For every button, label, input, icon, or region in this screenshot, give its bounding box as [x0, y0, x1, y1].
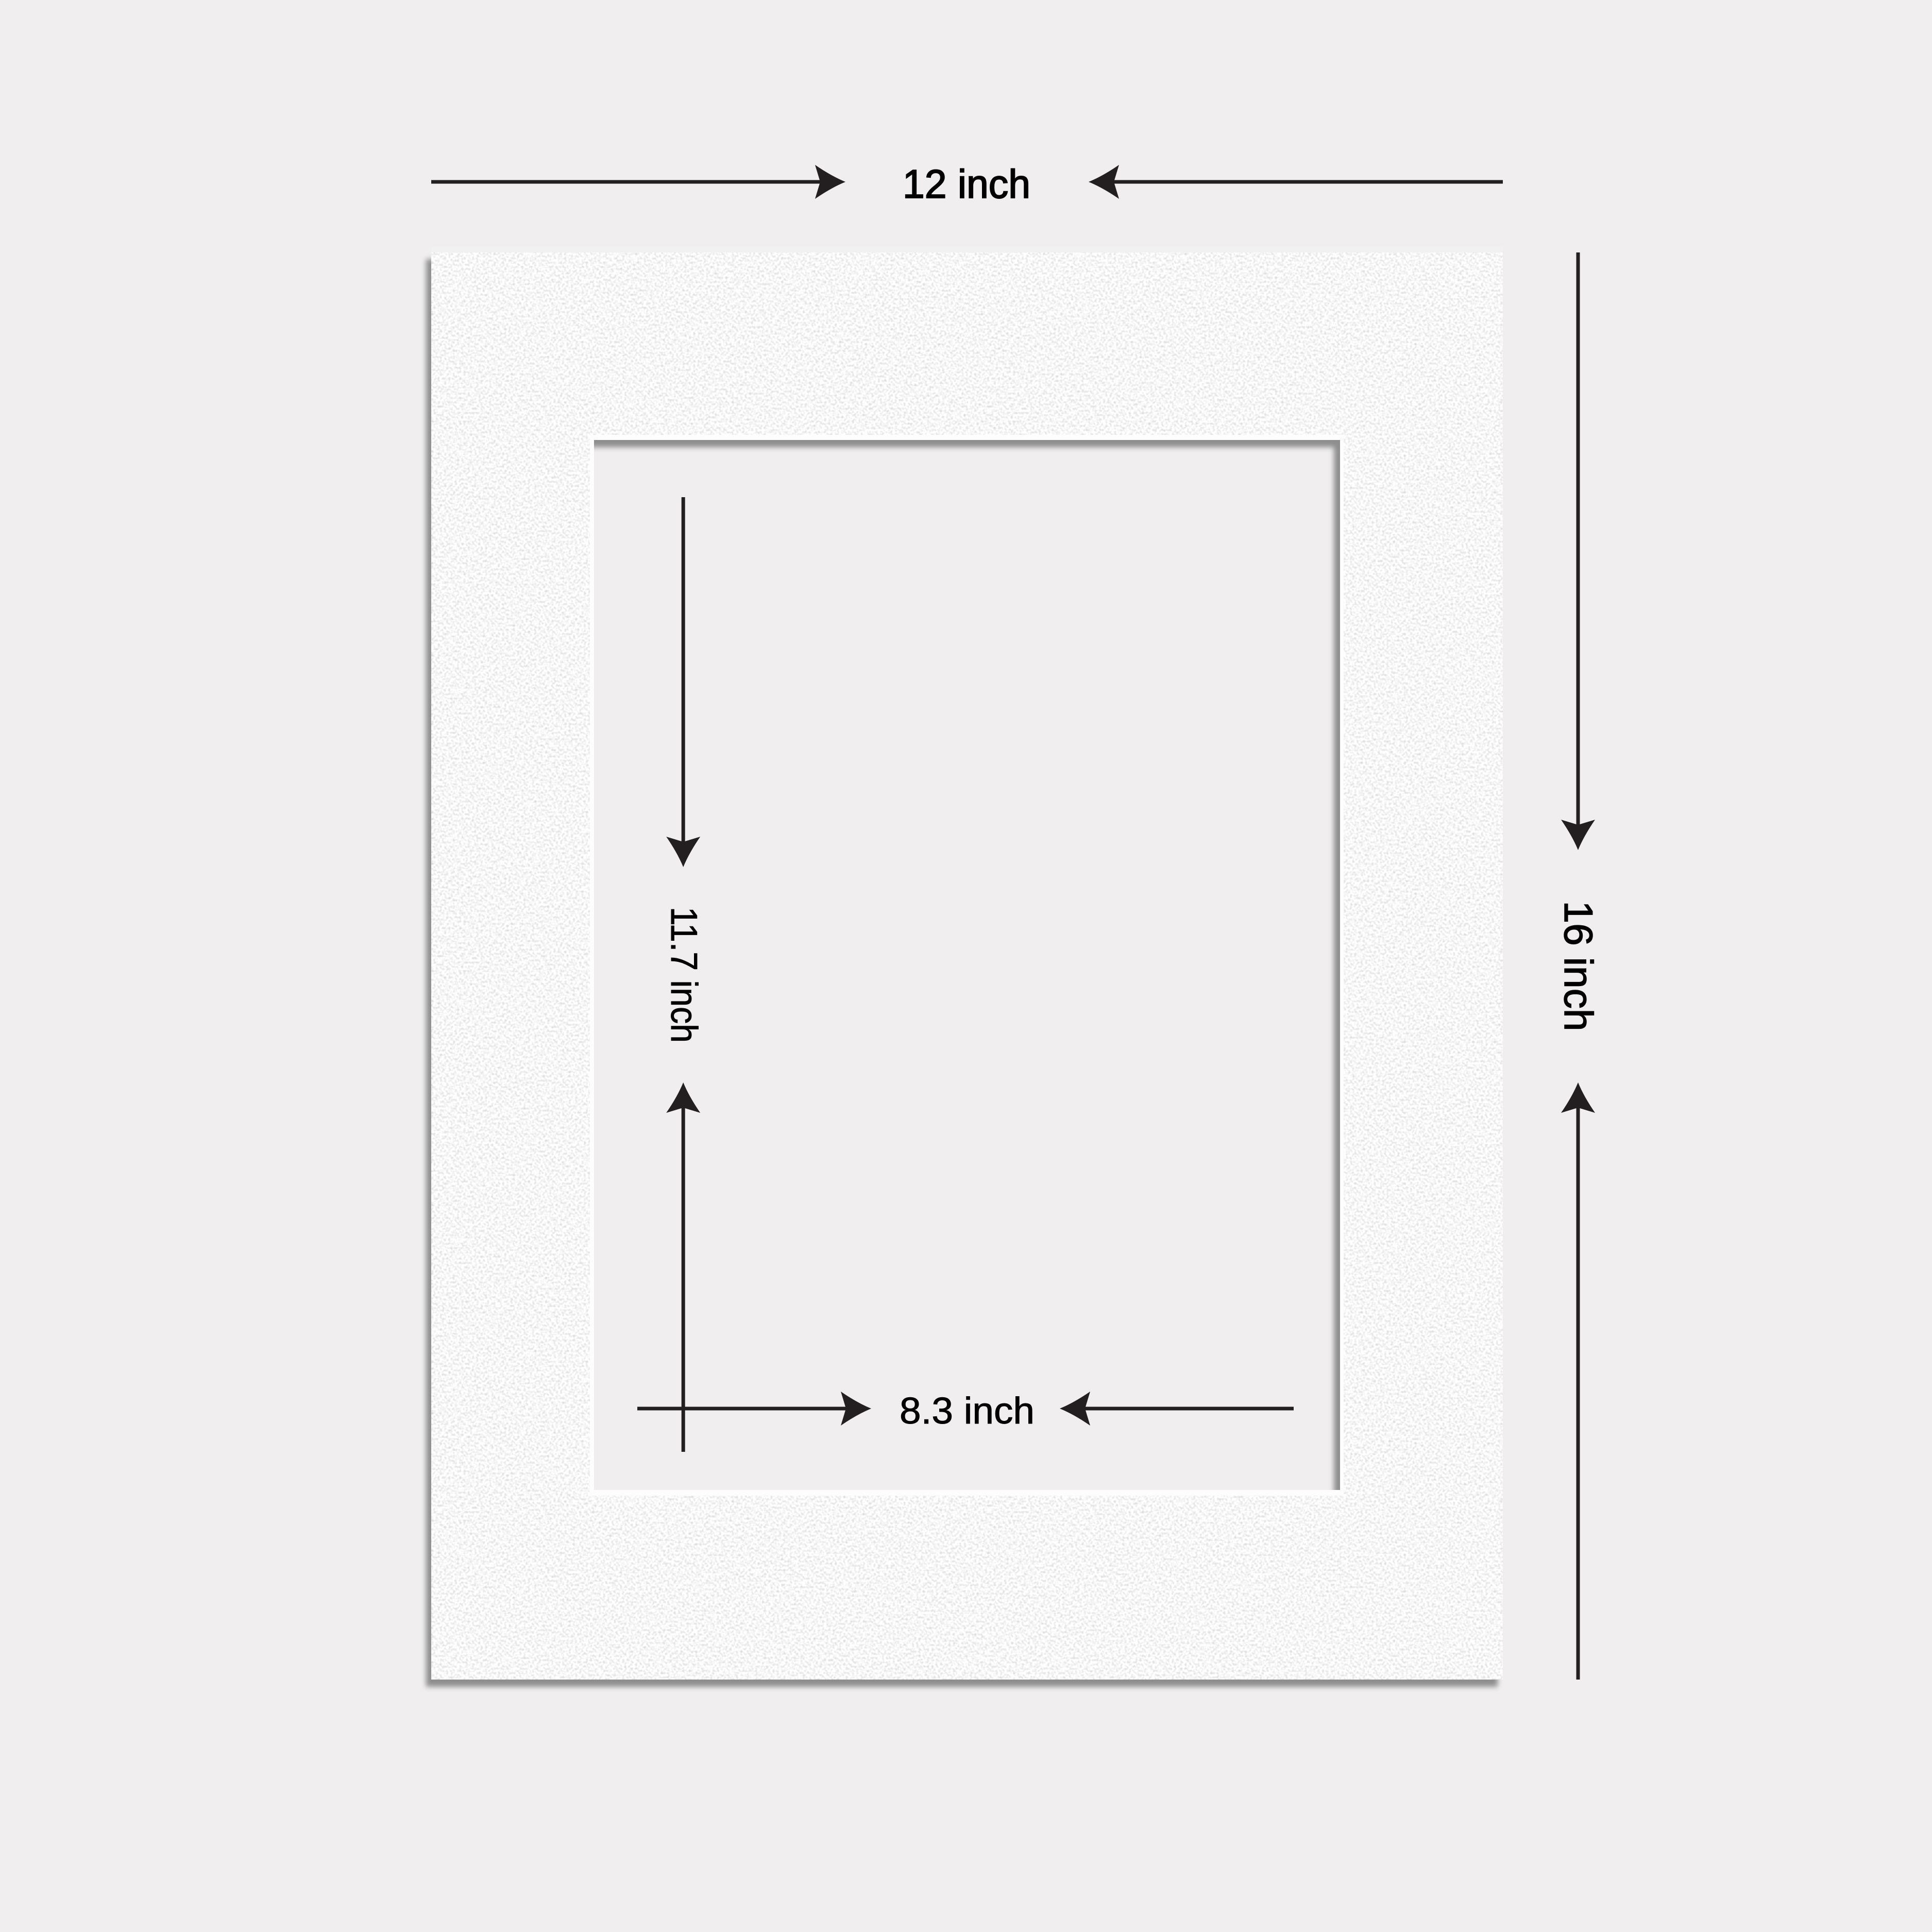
mat top edge glow: [431, 246, 1503, 252]
window white bevel: [590, 435, 1344, 1496]
mat drop shadow: [426, 259, 1498, 1687]
label: 8.3 inch: 8.3 inch: [900, 1391, 1035, 1432]
label: 11.7 inch: 11.7 inch: [663, 907, 704, 1043]
mat textured paper: [431, 252, 1503, 1680]
arrow: 11.7 inch up: [666, 1082, 700, 1452]
label: 12 inch: 12 inch: [903, 161, 1030, 207]
arrow: 8.3 inch right: [1060, 1392, 1294, 1426]
arrow: 12 inch right: [1089, 165, 1503, 199]
arrow: 8.3 inch left: [637, 1392, 871, 1426]
arrow: 16 inch up: [1561, 1082, 1595, 1680]
arrow: 12 inch left: [431, 165, 845, 199]
arrow: 11.7 inch down: [666, 497, 700, 867]
label: 16 inch: 16 inch: [1556, 901, 1601, 1031]
panel: mat board with window opening: [426, 246, 1503, 1687]
arrow: 16 inch down: [1561, 252, 1595, 850]
